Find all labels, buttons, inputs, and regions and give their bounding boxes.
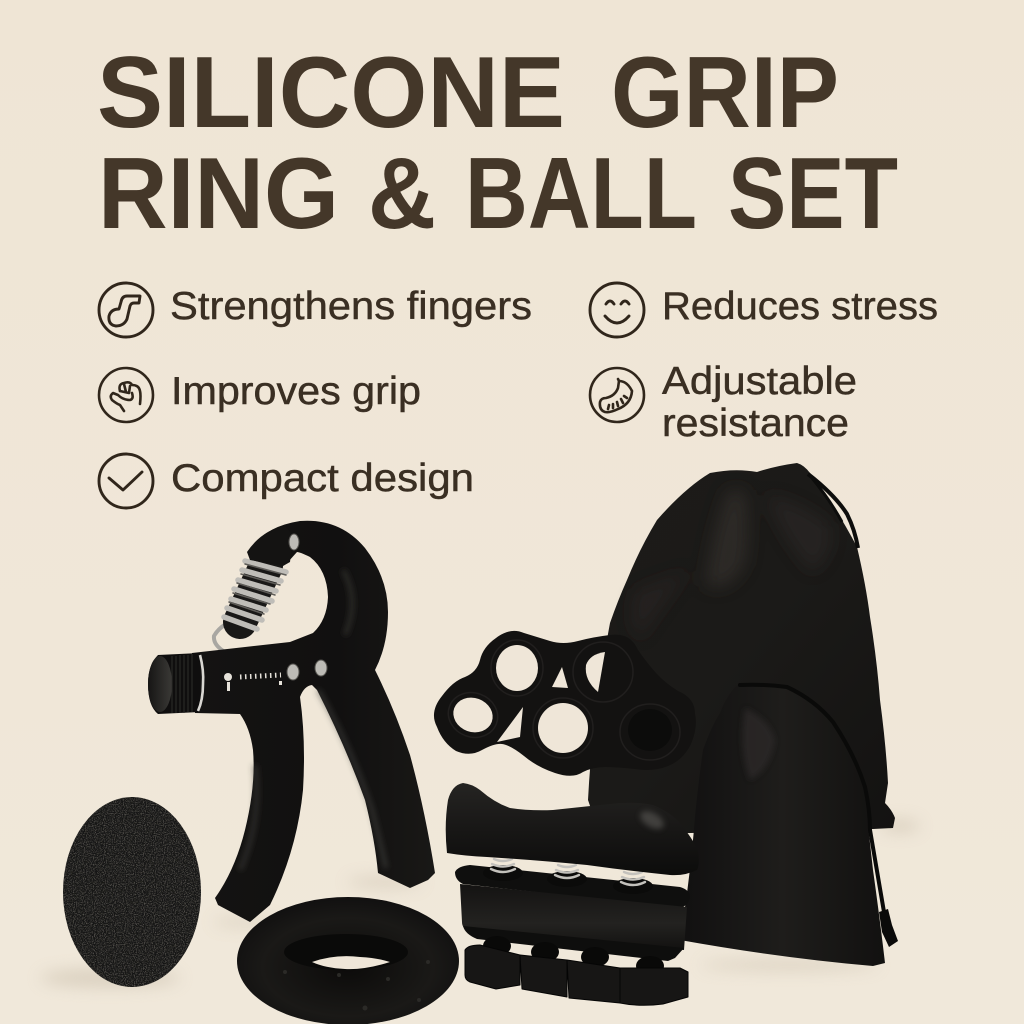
title xyxy=(97,37,898,250)
hole rims xyxy=(442,640,680,760)
finger pads xyxy=(465,945,688,1005)
handle highlights xyxy=(240,570,386,870)
spring mount xyxy=(247,526,293,566)
rivets xyxy=(287,534,327,680)
icon: fist xyxy=(99,368,153,422)
finger stretcher band xyxy=(434,631,696,776)
title: BALL xyxy=(465,138,697,250)
scale markings xyxy=(224,673,282,691)
label: compact design: Compact design xyxy=(171,457,474,500)
upper plate xyxy=(455,865,690,908)
adjustment knob xyxy=(148,653,203,714)
label: reduces stress: Reduces stress xyxy=(662,285,938,328)
satin folds xyxy=(742,708,775,780)
label: improves grip: Improves grip xyxy=(171,370,421,413)
large drawstring bag xyxy=(588,463,895,835)
icon: finger note xyxy=(99,283,153,337)
title: RING xyxy=(98,138,339,250)
feature: improves grip xyxy=(99,368,421,422)
small drawstring bag xyxy=(680,683,898,966)
hand gripper xyxy=(148,521,435,922)
silicone grip ring xyxy=(237,897,459,1024)
soft floor shadows xyxy=(40,820,920,987)
icon: check mark xyxy=(99,454,153,508)
label: strengthens fingers: Strengthens fingers xyxy=(170,285,532,328)
label: adjustable resistance: Adjustable xyxy=(662,360,857,403)
title: SET xyxy=(728,138,898,250)
steel spring hook xyxy=(214,618,243,652)
ring hole xyxy=(312,956,390,969)
body block xyxy=(460,884,687,950)
band holes xyxy=(448,645,605,753)
drawstring and knot xyxy=(740,685,884,912)
gripper body xyxy=(192,521,435,922)
feature: compact design xyxy=(99,454,474,508)
label: adjustable resistance xyxy=(662,360,857,445)
lower spring posts xyxy=(483,936,664,976)
closed ring cap xyxy=(628,709,672,751)
steel spring xyxy=(224,561,286,629)
inner wall xyxy=(284,934,408,970)
drawstring xyxy=(808,474,858,548)
feature: reduces stress xyxy=(590,283,938,337)
label: adjustable resistance: resistance xyxy=(662,402,849,445)
bar highlight xyxy=(637,807,667,833)
feature: adjustable resistance xyxy=(590,360,857,445)
top finger bar xyxy=(446,783,699,875)
icon: smiling face xyxy=(590,283,644,337)
icon: grip ring segment xyxy=(590,368,644,422)
finger exerciser xyxy=(446,783,699,1005)
title: SILICONE xyxy=(97,37,565,149)
spring trio xyxy=(483,859,653,894)
title: & xyxy=(368,138,436,250)
title: GRIP xyxy=(611,37,839,149)
feature: strengthens fingers xyxy=(99,283,532,337)
satin folds xyxy=(631,490,831,640)
foam squeeze ball xyxy=(63,797,201,987)
lower plate xyxy=(463,926,684,961)
ring bumps xyxy=(283,960,430,1010)
